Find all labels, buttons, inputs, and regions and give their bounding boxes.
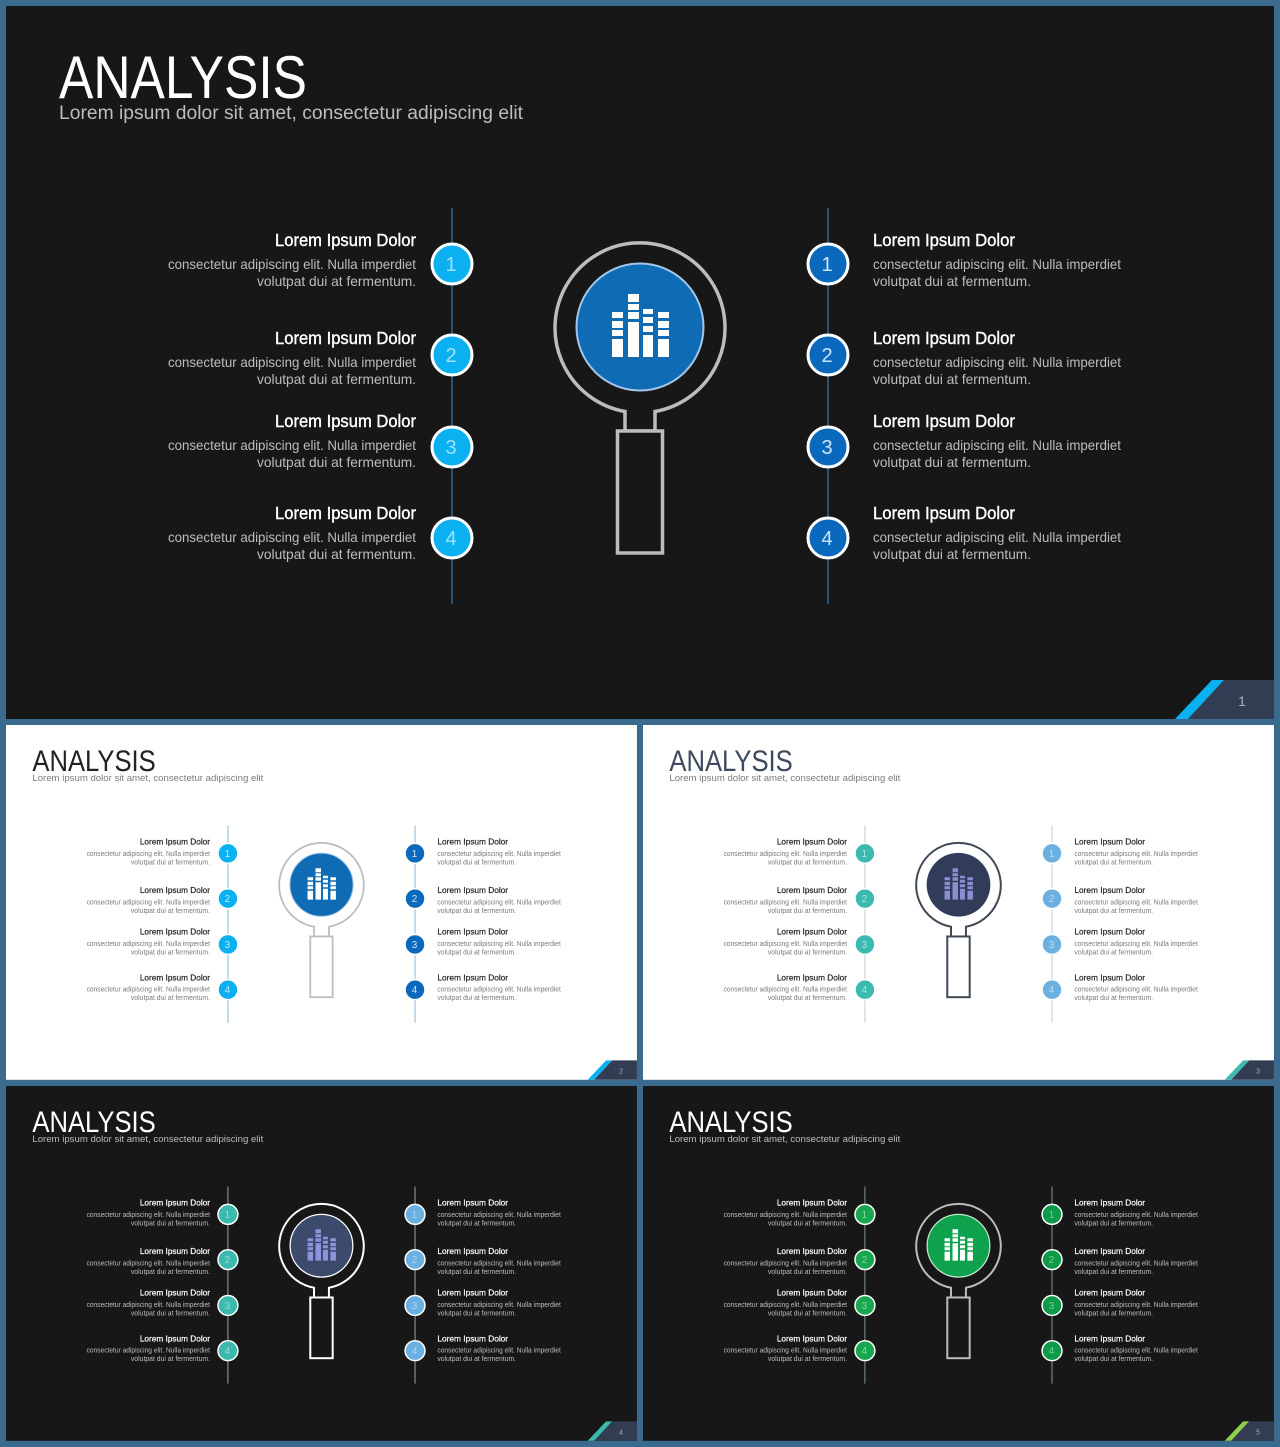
left item 4: volutpat dui at fermentum. [131,1356,210,1363]
right item 3: consectetur adipiscing elit. Nulla imperdiet [873,437,1121,453]
right item 4: Lorem Ipsum Dolor [437,1333,508,1343]
right item 2: 2 [412,1255,418,1266]
left item 1: 1 [862,1210,868,1221]
left item 3: volutpat dui at fermentum. [768,1310,847,1317]
left item 1 [87,836,238,866]
right item 3: 3 [1049,940,1055,951]
footer tab: 1 [1238,693,1246,709]
right item 4: 4 [412,985,418,996]
right item 4: 4 [821,528,833,550]
right item 1: consectetur adipiscing elit. Nulla imperdiet [1074,851,1198,858]
left item 4 [87,972,238,1002]
left item 3 [168,411,472,470]
right timeline line [1051,1187,1053,1384]
right item 4: consectetur adipiscing elit. Nulla imperdiet [1074,987,1198,994]
right item 1: 1 [412,849,418,860]
left item 4: volutpat dui at fermentum. [768,995,847,1002]
right item 4: consectetur adipiscing elit. Nulla imperdiet [437,987,561,994]
right item 1: volutpat dui at fermentum. [873,273,1031,289]
left item 1: volutpat dui at fermentum. [131,1220,210,1227]
left item 1: consectetur adipiscing elit. Nulla imperdiet [724,1212,847,1219]
left item 1 [724,1197,875,1227]
right item 3: consectetur adipiscing elit. Nulla imperdiet [437,941,561,948]
right item 2: 2 [1049,1255,1055,1266]
title: ANALYSIS [669,1106,793,1139]
right item 3 [808,411,1121,470]
right item 1: Lorem Ipsum Dolor [1074,836,1145,846]
left item 1: Lorem Ipsum Dolor [140,1197,210,1207]
left item 3: 3 [225,1301,231,1312]
subtitle: Lorem ipsum dolor sit amet, consectetur adipiscing elit [669,773,901,784]
right item 3: Lorem Ipsum Dolor [1074,1287,1145,1297]
right item 3: volutpat dui at fermentum. [437,949,516,956]
left item 4: Lorem Ipsum Dolor [275,503,416,523]
left item 2: volutpat dui at fermentum. [131,1269,210,1276]
footer tab [1225,1060,1274,1080]
left item 1: 1 [445,254,457,276]
right item 2: consectetur adipiscing elit. Nulla imperdiet [437,900,561,907]
right item 2: volutpat dui at fermentum. [437,908,516,915]
right item 2: consectetur adipiscing elit. Nulla imperdiet [1074,900,1198,907]
left item 3: 3 [445,437,457,459]
title: ANALYSIS [59,44,307,111]
left item 3: 3 [862,1301,868,1312]
left item 2: consectetur adipiscing elit. Nulla imperdiet [87,1261,210,1268]
left item 4: consectetur adipiscing elit. Nulla imperdiet [724,1348,847,1355]
left item 4: consectetur adipiscing elit. Nulla imperdiet [87,987,210,994]
left item 3 [87,1287,238,1317]
footer tab [1225,1421,1274,1441]
left item 2: consectetur adipiscing elit. Nulla imperdiet [87,900,210,907]
right item 3: consectetur adipiscing elit. Nulla imperdiet [437,1302,561,1309]
left item 4 [87,1333,238,1363]
right item 2: 2 [1049,894,1055,905]
right item 4 [405,1333,561,1363]
left item 2: 2 [225,894,231,905]
left item 3: consectetur adipiscing elit. Nulla imperdiet [168,437,416,453]
right item 1: consectetur adipiscing elit. Nulla imperdiet [437,1212,561,1219]
left item 2 [724,1246,875,1276]
left timeline line [451,208,453,604]
left item 3 [724,926,875,956]
footer tab [588,1060,637,1080]
left item 3: consectetur adipiscing elit. Nulla imperdiet [87,941,210,948]
left item 4: consectetur adipiscing elit. Nulla imperdiet [168,529,416,545]
right item 1 [1042,836,1198,866]
subtitle: Lorem ipsum dolor sit amet, consectetur adipiscing elit [32,1134,264,1145]
left item 2: Lorem Ipsum Dolor [275,328,416,348]
right item 2: volutpat dui at fermentum. [1074,1269,1153,1276]
left item 1: consectetur adipiscing elit. Nulla imperdiet [724,851,847,858]
left item 3: Lorem Ipsum Dolor [275,411,416,431]
left item 2: Lorem Ipsum Dolor [140,885,210,895]
right item 1: Lorem Ipsum Dolor [873,230,1015,250]
left item 4: volutpat dui at fermentum. [257,546,416,562]
left item 4: 4 [225,985,231,996]
left item 2: consectetur adipiscing elit. Nulla imperdiet [168,354,416,370]
right item 2: consectetur adipiscing elit. Nulla imperdiet [437,1261,561,1268]
left item 3 [87,926,238,956]
slide 3: white slate and teal version [643,725,1274,1080]
left item 1 [168,230,472,289]
title: ANALYSIS [669,745,793,778]
icon: magnifying glass with bars [279,1204,364,1358]
right item 1 [405,1197,561,1227]
left item 4: Lorem Ipsum Dolor [140,972,210,982]
left item 4 [168,503,472,562]
left item 3 [724,1287,875,1317]
icon: magnifying glass with bars [555,243,725,553]
left timeline line [864,1187,866,1384]
right item 3 [1042,1287,1198,1317]
left item 4: volutpat dui at fermentum. [131,995,210,1002]
left item 3: consectetur adipiscing elit. Nulla imperdiet [87,1302,210,1309]
right item 1: Lorem Ipsum Dolor [1074,1197,1145,1207]
right item 4: Lorem Ipsum Dolor [873,503,1015,523]
left item 4: volutpat dui at fermentum. [768,1356,847,1363]
left item 2: consectetur adipiscing elit. Nulla imperdiet [724,1261,847,1268]
right item 4: volutpat dui at fermentum. [873,546,1031,562]
right item 1: 1 [1049,1210,1055,1221]
right item 4: volutpat dui at fermentum. [1074,1356,1153,1363]
left item 1: Lorem Ipsum Dolor [140,836,210,846]
left timeline line [864,826,866,1023]
right item 3: consectetur adipiscing elit. Nulla imperdiet [1074,941,1198,948]
left item 4: 4 [862,1346,868,1357]
left item 3: volutpat dui at fermentum. [768,949,847,956]
right item 4: 4 [1049,1346,1055,1357]
left item 4 [724,972,875,1002]
left item 1 [724,836,875,866]
slide 4: dark slate and teal version [6,1086,637,1441]
left timeline line [227,826,229,1023]
footer tab: 3 [1256,1068,1260,1075]
right item 3: 3 [412,940,418,951]
subtitle: Lorem ipsum dolor sit amet, consectetur adipiscing elit [59,103,524,124]
right item 4: volutpat dui at fermentum. [1074,995,1153,1002]
left item 3: Lorem Ipsum Dolor [140,1287,210,1297]
right item 1: volutpat dui at fermentum. [1074,1220,1153,1227]
footer tab: 5 [1256,1429,1260,1436]
right item 2: volutpat dui at fermentum. [1074,908,1153,915]
left timeline line [227,1187,229,1384]
right item 1: 1 [412,1210,418,1221]
left item 1: Lorem Ipsum Dolor [275,230,416,250]
right item 3: 3 [821,437,833,459]
icon: magnifying glass with bars [916,1204,1001,1358]
footer tab: 2 [619,1068,623,1075]
right item 1: Lorem Ipsum Dolor [437,836,508,846]
right item 2: Lorem Ipsum Dolor [873,328,1015,348]
right item 4: volutpat dui at fermentum. [437,1356,516,1363]
left item 3: Lorem Ipsum Dolor [777,1287,847,1297]
right item 2 [405,885,561,915]
left item 1: volutpat dui at fermentum. [131,859,210,866]
left item 1: volutpat dui at fermentum. [257,273,416,289]
right item 2: Lorem Ipsum Dolor [1074,885,1145,895]
right item 4 [1042,972,1198,1002]
right item 4: volutpat dui at fermentum. [437,995,516,1002]
left item 2: volutpat dui at fermentum. [131,908,210,915]
left item 1: 1 [225,1210,231,1221]
right timeline line [1051,826,1053,1023]
left item 3: volutpat dui at fermentum. [131,949,210,956]
right item 4: consectetur adipiscing elit. Nulla imperdiet [437,1348,561,1355]
right item 3: volutpat dui at fermentum. [1074,1310,1153,1317]
right item 3: Lorem Ipsum Dolor [437,1287,508,1297]
left item 2: Lorem Ipsum Dolor [140,1246,210,1256]
right item 3: 3 [412,1301,418,1312]
left item 1: consectetur adipiscing elit. Nulla imperdiet [87,851,210,858]
left item 2: 2 [862,1255,868,1266]
left item 3: 3 [225,940,231,951]
right item 4 [1042,1333,1198,1363]
left item 1: volutpat dui at fermentum. [768,859,847,866]
right item 2: volutpat dui at fermentum. [437,1269,516,1276]
right item 2 [1042,885,1198,915]
right item 2: 2 [821,345,833,367]
left item 2: volutpat dui at fermentum. [257,371,416,387]
right item 2 [1042,1246,1198,1276]
left item 1: consectetur adipiscing elit. Nulla imperdiet [87,1212,210,1219]
right item 3: consectetur adipiscing elit. Nulla imperdiet [1074,1302,1198,1309]
right item 3: volutpat dui at fermentum. [437,1310,516,1317]
right item 3 [405,1287,561,1317]
title: ANALYSIS [32,745,156,778]
left item 4: 4 [862,985,868,996]
left item 4: consectetur adipiscing elit. Nulla imperdiet [87,1348,210,1355]
right item 1 [405,836,561,866]
left item 1: Lorem Ipsum Dolor [777,1197,847,1207]
right item 2: Lorem Ipsum Dolor [1074,1246,1145,1256]
left item 2: 2 [225,1255,231,1266]
left item 2 [87,1246,238,1276]
icon: magnifying glass with bars [916,843,1001,997]
right item 4: Lorem Ipsum Dolor [1074,1333,1145,1343]
left item 3: 3 [862,940,868,951]
left item 2: Lorem Ipsum Dolor [777,885,847,895]
right timeline line [414,826,416,1023]
left item 2: 2 [862,894,868,905]
left item 4: 4 [225,1346,231,1357]
right item 2: 2 [412,894,418,905]
left item 2: volutpat dui at fermentum. [768,1269,847,1276]
left item 1: volutpat dui at fermentum. [768,1220,847,1227]
right item 3 [405,926,561,956]
right item 2 [808,328,1121,387]
slide 5: dark green version [643,1086,1274,1441]
right item 3: volutpat dui at fermentum. [1074,949,1153,956]
footer tab [588,1421,637,1441]
left item 4 [724,1333,875,1363]
right item 1: consectetur adipiscing elit. Nulla imperdiet [873,256,1121,272]
left item 1: 1 [225,849,231,860]
left item 2: volutpat dui at fermentum. [768,908,847,915]
right item 1 [808,230,1121,289]
right item 4: consectetur adipiscing elit. Nulla imperdiet [1074,1348,1198,1355]
left item 4: Lorem Ipsum Dolor [777,972,847,982]
subtitle: Lorem ipsum dolor sit amet, consectetur adipiscing elit [669,1134,901,1145]
left item 2 [724,885,875,915]
right item 1: consectetur adipiscing elit. Nulla imperdiet [1074,1212,1198,1219]
right item 3: Lorem Ipsum Dolor [437,926,508,936]
slide 2: white blue version [6,725,637,1080]
right item 3: 3 [1049,1301,1055,1312]
left item 1 [87,1197,238,1227]
right item 3: Lorem Ipsum Dolor [873,411,1015,431]
right item 4: 4 [412,1346,418,1357]
footer tab [1175,680,1274,719]
left item 4: consectetur adipiscing elit. Nulla imperdiet [724,987,847,994]
left item 2 [87,885,238,915]
right item 4 [405,972,561,1002]
right item 2: Lorem Ipsum Dolor [437,1246,508,1256]
left item 3: Lorem Ipsum Dolor [140,926,210,936]
right timeline line [414,1187,416,1384]
right item 1: Lorem Ipsum Dolor [437,1197,508,1207]
right item 1: volutpat dui at fermentum. [437,859,516,866]
left item 1: 1 [862,849,868,860]
right item 1: consectetur adipiscing elit. Nulla imperdiet [437,851,561,858]
left item 2 [168,328,472,387]
right item 1 [1042,1197,1198,1227]
footer tab: 4 [619,1429,623,1436]
left item 1: consectetur adipiscing elit. Nulla imperdiet [168,256,416,272]
right timeline line [827,208,829,604]
left item 1: Lorem Ipsum Dolor [777,836,847,846]
left item 3: Lorem Ipsum Dolor [777,926,847,936]
left item 3: consectetur adipiscing elit. Nulla imperdiet [724,941,847,948]
left item 3: volutpat dui at fermentum. [257,454,416,470]
left item 4: 4 [445,528,457,550]
left item 4: Lorem Ipsum Dolor [140,1333,210,1343]
left item 4: Lorem Ipsum Dolor [777,1333,847,1343]
left item 2: Lorem Ipsum Dolor [777,1246,847,1256]
title: ANALYSIS [32,1106,156,1139]
subtitle: Lorem ipsum dolor sit amet, consectetur adipiscing elit [32,773,264,784]
right item 4: Lorem Ipsum Dolor [437,972,508,982]
right item 2: consectetur adipiscing elit. Nulla imperdiet [873,354,1121,370]
right item 3: volutpat dui at fermentum. [873,454,1031,470]
right item 1: volutpat dui at fermentum. [1074,859,1153,866]
right item 4 [808,503,1121,562]
right item 4: consectetur adipiscing elit. Nulla imperdiet [873,529,1121,545]
left item 2: 2 [445,345,457,367]
right item 2: consectetur adipiscing elit. Nulla imperdiet [1074,1261,1198,1268]
left item 3: consectetur adipiscing elit. Nulla imperdiet [724,1302,847,1309]
left item 3: volutpat dui at fermentum. [131,1310,210,1317]
slide 1: large dark blue version [6,6,1274,719]
icon: magnifying glass with bars [279,843,364,997]
right item 2 [405,1246,561,1276]
right item 1: 1 [1049,849,1055,860]
right item 2: volutpat dui at fermentum. [873,371,1031,387]
right item 4: 4 [1049,985,1055,996]
right item 4: Lorem Ipsum Dolor [1074,972,1145,982]
right item 2: Lorem Ipsum Dolor [437,885,508,895]
right item 1: volutpat dui at fermentum. [437,1220,516,1227]
right item 3 [1042,926,1198,956]
right item 3: Lorem Ipsum Dolor [1074,926,1145,936]
left item 2: consectetur adipiscing elit. Nulla imperdiet [724,900,847,907]
right item 1: 1 [821,254,833,276]
